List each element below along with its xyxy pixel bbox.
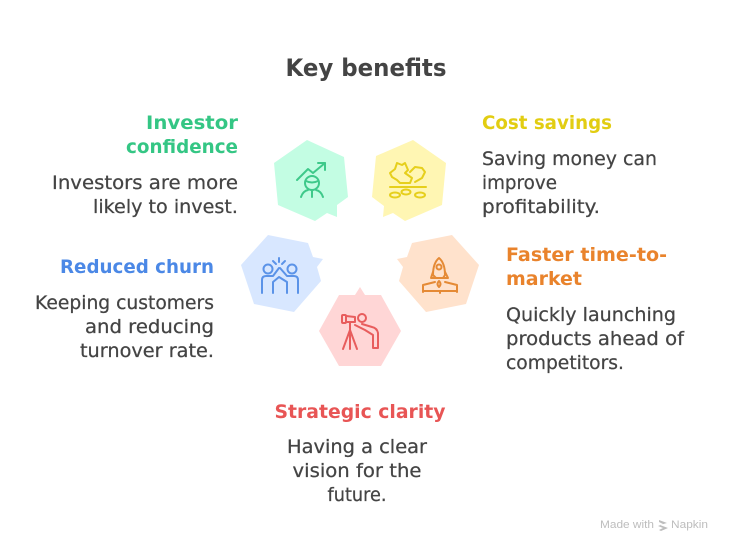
- text: strategic clarity description: vision for the: [292, 460, 422, 482]
- icon: person with telescope: [342, 314, 378, 349]
- text: reduced churn description: Keeping customers: [35, 292, 214, 314]
- icon: rocket launch: [423, 258, 457, 293]
- text: reduced churn description: and reducing: [85, 316, 214, 338]
- shape: green polygon: [274, 140, 348, 221]
- heading: faster time-to-market: [506, 244, 667, 290]
- text: faster time-to-market description: competitors.: [506, 352, 624, 374]
- shape: red polygon: [319, 287, 401, 366]
- heading: investor confidence: [126, 112, 239, 158]
- title: Key benefits: [286, 54, 446, 82]
- text: cost savings description: Saving money can: [482, 148, 657, 170]
- heading: faster time-to-market: market: [506, 268, 582, 290]
- panel: investor confidence: [52, 112, 348, 221]
- shape: yellow polygon: [372, 140, 446, 221]
- text: cost savings description: profitability.: [482, 196, 600, 218]
- text: cost savings description: [482, 148, 657, 218]
- text: faster time-to-market description: Quickly launching: [506, 304, 676, 326]
- text: strategic clarity description: Having a clear: [287, 436, 427, 458]
- text: faster time-to-market description: [506, 304, 685, 374]
- shape: blue polygon: [241, 235, 323, 312]
- heading: investor confidence: confidence: [126, 136, 238, 158]
- text: strategic clarity description: [287, 436, 427, 506]
- text: investor confidence description: [52, 172, 238, 218]
- watermark: made with napkin: Napkin: [671, 519, 708, 531]
- heading: investor confidence: Investor: [146, 112, 239, 134]
- icon: napkin logo: [658, 520, 668, 531]
- heading: faster time-to-market: Faster time-to-: [506, 244, 667, 266]
- text: investor confidence description: Investors are more: [52, 172, 238, 194]
- text: reduced churn description: [35, 292, 214, 362]
- panel: cost savings: [372, 112, 657, 221]
- text: reduced churn description: turnover rate.: [80, 340, 214, 362]
- text: faster time-to-market description: products ahead of: [506, 328, 685, 350]
- watermark: made with napkin: Made with: [600, 519, 654, 531]
- panel: reduced churn: [35, 235, 323, 362]
- heading: reduced churn: Reduced churn: [60, 256, 214, 278]
- text: cost savings description: improve: [482, 172, 557, 194]
- text: strategic clarity description: future.: [328, 484, 386, 506]
- watermark: made with napkin: [600, 519, 708, 531]
- icon: broken piggy bank and coins: [390, 163, 426, 198]
- shape: orange polygon: [397, 235, 479, 312]
- heading: cost savings: Cost savings: [482, 112, 612, 134]
- icon: person with rising arrow: [297, 163, 325, 197]
- icon: two people high five: [262, 258, 298, 293]
- panel: faster time-to-market: [397, 235, 685, 374]
- panel: strategic clarity: [274, 287, 446, 506]
- text: investor confidence description: likely to invest.: [93, 196, 238, 218]
- heading: strategic clarity: Strategic clarity: [274, 401, 446, 423]
